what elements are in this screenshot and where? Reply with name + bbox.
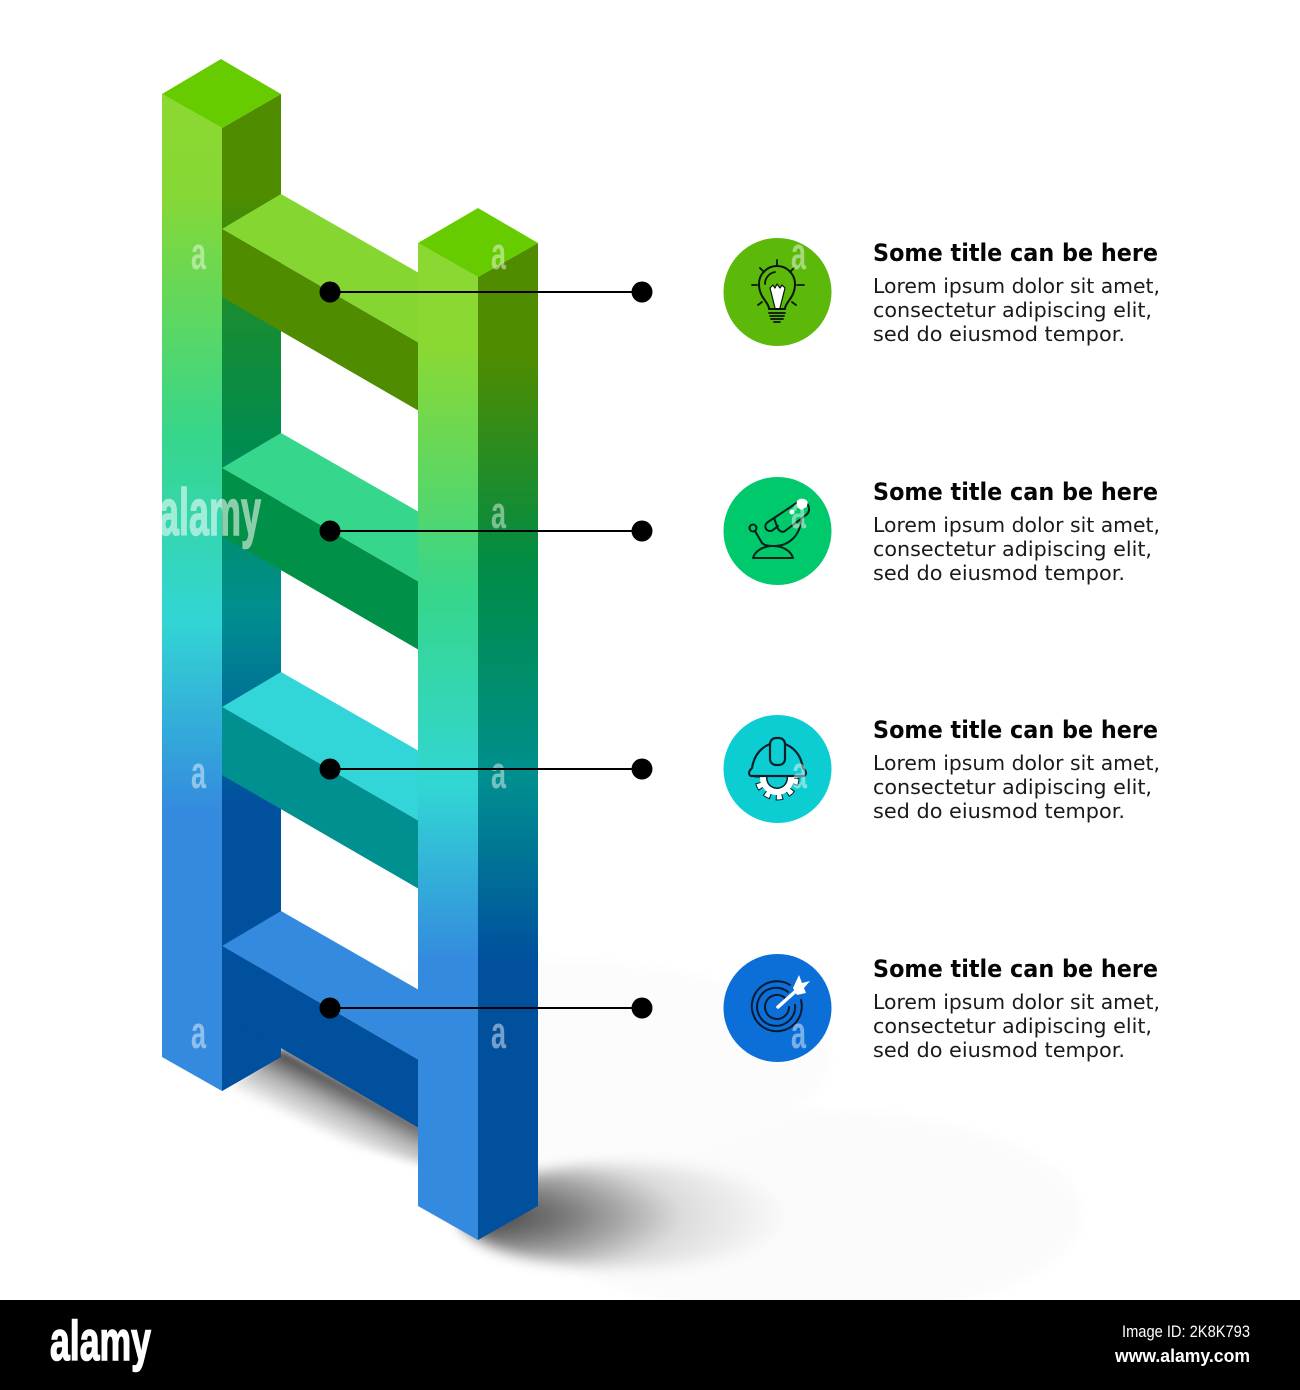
icon: light bulb: a xyxy=(791,228,807,279)
right post xyxy=(418,208,538,1240)
rung 1 xyxy=(222,194,419,411)
watermark letters: a xyxy=(491,747,507,798)
ground shadows xyxy=(222,960,1082,1320)
text block 4 xyxy=(873,955,1160,1062)
text block 2: Some title can be here xyxy=(873,478,1158,506)
ladder illustration xyxy=(162,59,538,1240)
text block 1: Lorem ipsum dolor sit amet, xyxy=(873,274,1160,298)
text block 4: sed do eiusmod tempor. xyxy=(873,1038,1125,1062)
icon: light bulb xyxy=(724,228,832,346)
icon: helmet and gear xyxy=(724,715,832,823)
watermark letters: a xyxy=(491,1007,507,1058)
text block 1: consectetur adipiscing elit, xyxy=(873,298,1152,322)
footer logo: alamy xyxy=(50,1309,151,1372)
rung 3 xyxy=(222,672,419,889)
icon: target and arrow: a xyxy=(791,1007,807,1058)
text block 3 xyxy=(873,716,1160,823)
rung 2 xyxy=(222,433,419,650)
watermark letters: a xyxy=(491,487,507,538)
text block 2: sed do eiusmod tempor. xyxy=(873,561,1125,585)
watermark letters xyxy=(159,228,507,1058)
text block 4: Lorem ipsum dolor sit amet, xyxy=(873,990,1160,1014)
text block 2: consectetur adipiscing elit, xyxy=(873,537,1152,561)
footer bar xyxy=(0,1300,1300,1390)
connector 4 xyxy=(320,998,652,1018)
left post xyxy=(162,59,281,1091)
text block 1: sed do eiusmod tempor. xyxy=(873,322,1125,346)
icon: target and arrow xyxy=(724,954,832,1062)
icon: helmet and gear: a xyxy=(792,747,808,798)
text block 4: Some title can be here xyxy=(873,955,1158,983)
text block 1 xyxy=(873,239,1160,346)
text block 2 xyxy=(873,478,1160,585)
text block 4: consectetur adipiscing elit, xyxy=(873,1014,1152,1038)
icon: microscope xyxy=(724,477,832,585)
rung 4 xyxy=(222,911,419,1128)
footer url: www.alamy.com xyxy=(1114,1346,1250,1366)
text block 3: sed do eiusmod tempor. xyxy=(873,799,1125,823)
connector 2 xyxy=(320,520,652,542)
watermark letters: a xyxy=(191,228,207,279)
text block 3: Lorem ipsum dolor sit amet, xyxy=(873,751,1160,775)
text block 2: Lorem ipsum dolor sit amet, xyxy=(873,513,1160,537)
connector 1 xyxy=(320,282,652,302)
connector 3 xyxy=(320,758,652,780)
watermark letters: alamy xyxy=(159,475,261,549)
watermark letters: a xyxy=(191,747,207,798)
text block 1: Some title can be here xyxy=(873,239,1158,267)
footer image id: Image ID: 2K8K793 xyxy=(1122,1322,1250,1341)
text block 3: consectetur adipiscing elit, xyxy=(873,775,1152,799)
icon: microscope: a xyxy=(791,487,807,538)
text block 3: Some title can be here xyxy=(873,716,1158,744)
watermark letters: a xyxy=(491,228,507,279)
watermark letters: a xyxy=(191,1007,207,1058)
